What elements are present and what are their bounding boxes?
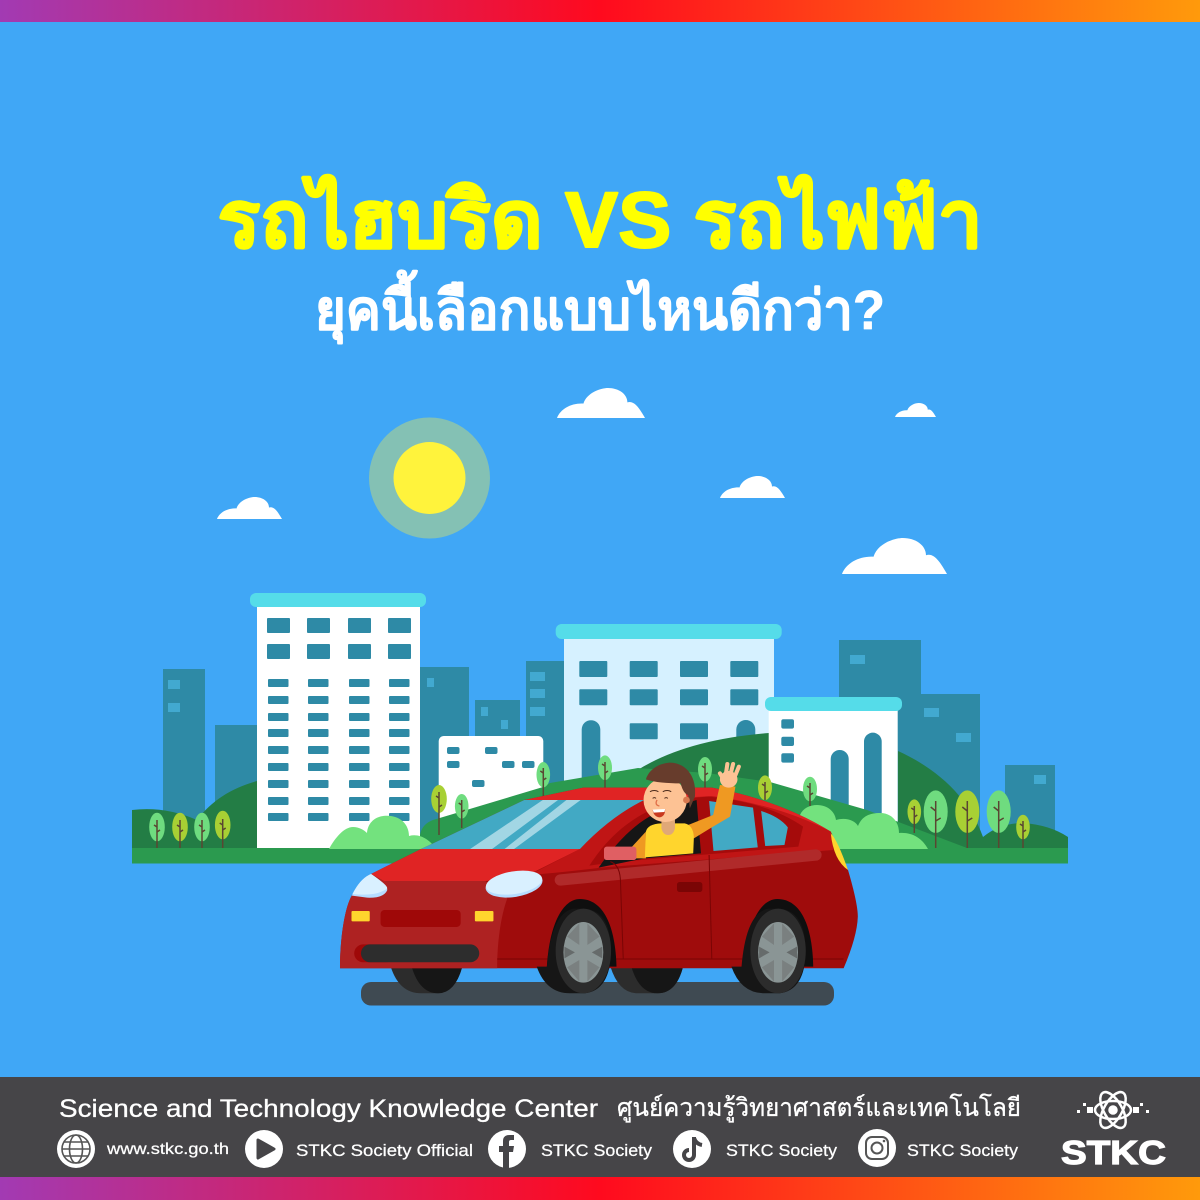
tail light	[831, 833, 848, 870]
footer heading: english: Science and Technology Knowledge Center	[59, 1095, 598, 1123]
website text: www.stkc.go.th	[106, 1141, 229, 1158]
upper body band	[529, 789, 833, 875]
top gradient bar	[0, 0, 1200, 22]
rear wheel	[731, 899, 813, 993]
youtube label: STKC Society Official	[296, 1141, 473, 1160]
footer band	[0, 1077, 1200, 1177]
logo: STKC wordmark: STKC	[1061, 1134, 1166, 1171]
middle building	[556, 624, 782, 809]
bumper	[354, 944, 479, 962]
neck	[661, 813, 675, 835]
road	[361, 982, 834, 1006]
car body side	[340, 788, 858, 968]
icon: facebook	[488, 1130, 526, 1168]
face	[650, 790, 671, 798]
dark hill over middle building	[630, 733, 769, 800]
driver raised arm	[688, 785, 735, 838]
icon: tiktok	[673, 1130, 711, 1168]
facebook label: STKC Society	[541, 1141, 653, 1160]
car	[340, 763, 858, 993]
waving hand	[720, 764, 739, 788]
mouth	[653, 809, 665, 817]
tower roof	[250, 593, 426, 607]
background buildings	[163, 640, 1055, 850]
headlights	[352, 867, 544, 901]
door handle	[677, 882, 702, 892]
windshield	[421, 800, 644, 849]
green ground and mid hill	[132, 768, 1068, 864]
mirror	[604, 847, 636, 860]
shirt	[645, 823, 694, 857]
icon: globe	[57, 1130, 95, 1168]
hair	[646, 763, 695, 808]
bushes	[329, 805, 928, 849]
body highlight strip	[560, 855, 816, 880]
icon: instagram	[858, 1129, 896, 1167]
tiktok label: STKC Society	[726, 1141, 838, 1160]
right building roof	[765, 697, 902, 711]
trees	[149, 755, 1030, 848]
driver	[629, 763, 739, 858]
icon: youtube play	[245, 1130, 283, 1168]
small white building	[439, 736, 543, 836]
logo: STKC atom mark	[1077, 1088, 1149, 1132]
bottom gradient bar	[0, 1177, 1200, 1200]
rear windows	[709, 801, 788, 851]
dark green hills	[132, 733, 1068, 850]
front lights and grille	[351, 910, 493, 927]
driver window	[599, 800, 701, 868]
door lines	[497, 855, 844, 959]
footer heading: thai: ศูนย์ความรู้วิทยาศาสตร์และเทคโนโลยี	[617, 1093, 1021, 1123]
middle building roof	[556, 624, 782, 639]
driver left arm	[629, 832, 646, 858]
roof	[524, 788, 831, 832]
front wheel	[537, 899, 616, 993]
middle building windows	[579, 661, 758, 805]
head	[644, 778, 687, 822]
subtitle: ยุคนี้เลือกแบบไหนดีกว่า?	[315, 270, 885, 345]
far wheels	[391, 967, 683, 993]
nose	[656, 800, 659, 806]
hood	[371, 849, 580, 881]
right building	[765, 697, 902, 835]
right building windows	[781, 719, 882, 835]
instagram label: STKC Society	[907, 1141, 1019, 1160]
tower windows	[267, 618, 411, 821]
icon: sun	[369, 418, 490, 538]
title: รถไฮบริด VS รถไฟฟ้า	[218, 174, 982, 264]
clouds	[217, 388, 947, 574]
tower building	[250, 593, 426, 849]
car front face	[340, 874, 507, 968]
side window frame	[589, 797, 803, 866]
ear	[683, 797, 690, 803]
